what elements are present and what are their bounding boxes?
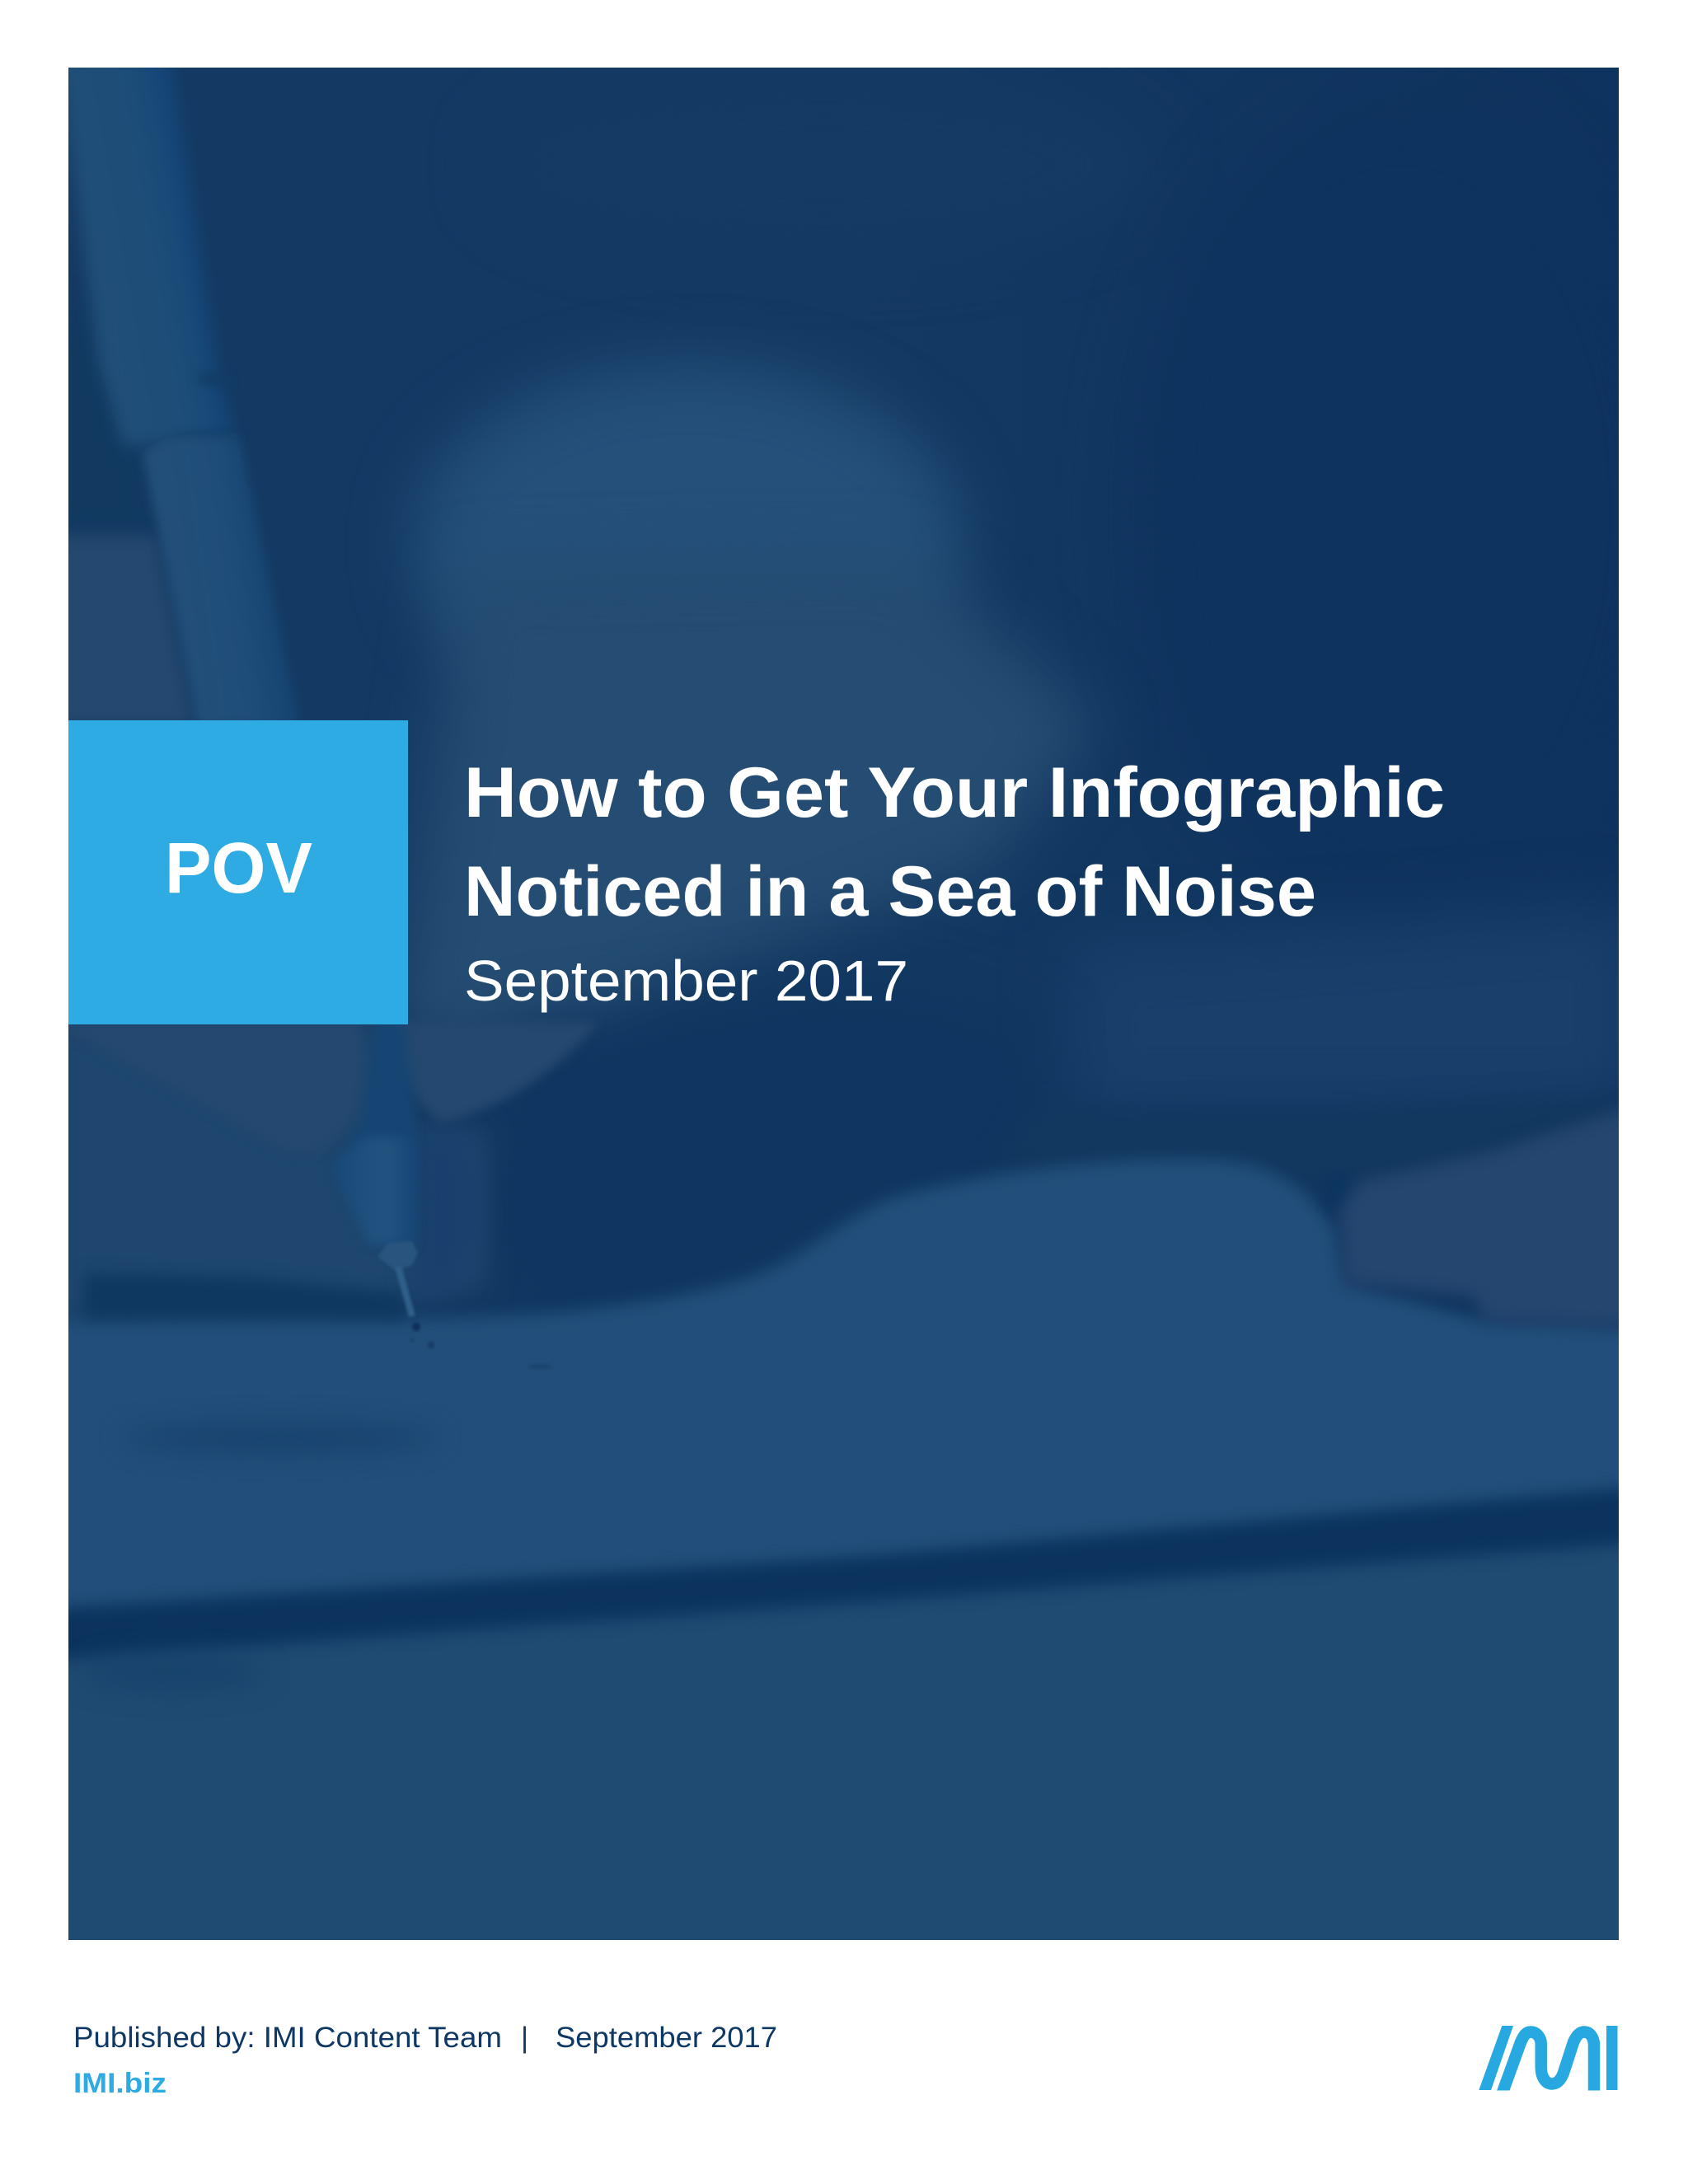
title [464,753,1445,931]
subtitle: date: September 2017 [464,949,908,1013]
dark region to the right of the pen [567,1012,631,1076]
icon: IMI logo [1479,2026,1617,2098]
pen needle [398,1267,412,1316]
title: How to Get Your Infographic [464,753,1445,832]
second finger, right of pen [412,1129,476,1298]
footer: publisher line: Published by: IMI Content Team [73,2022,502,2054]
footer: website: IMI.biz [73,2068,166,2099]
long dark diagonal shadow [49,1487,1640,1660]
pen notch [196,374,229,384]
dark left of pen, above box [49,297,157,536]
bottom surface [68,1554,1619,1940]
ink dots [412,1323,420,1331]
pen barrel lower [143,437,299,725]
dark band under hand [84,1273,405,1319]
smear on paper [124,1426,437,1451]
footer: publisher line [73,2022,777,2054]
right-hand mid tone [1097,919,1619,1094]
footer: publisher line: | [521,2022,528,2054]
paper [49,1160,1640,1648]
dark V notch [1325,1172,1349,1212]
POV label box [68,720,408,1024]
hand above box [68,536,190,720]
footer: publisher line: September 2017 [556,2022,777,2054]
thumb [78,1027,353,1033]
index finger [409,1024,590,1121]
right hand [1339,1111,1619,1325]
pen barrel upper [58,49,233,446]
pen barrel near the tip [334,1022,415,1244]
title: Noticed in a Sea of Noise [464,852,1316,931]
pen collar [377,1241,418,1271]
POV label text: POV [165,828,312,908]
central blob [409,357,968,614]
hand lower body [68,1038,484,1309]
